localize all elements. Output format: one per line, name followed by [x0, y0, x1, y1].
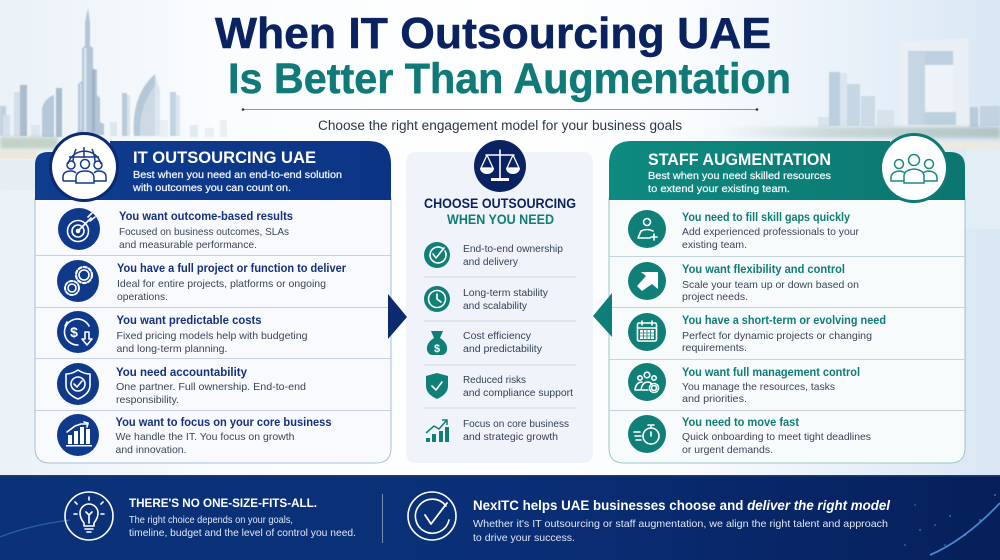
row: move fast: You need to move fast [682, 417, 799, 429]
row: outcome-based results: You want outcome-based results [119, 211, 293, 223]
header text [132, 148, 342, 194]
item: focus: Focus on core business [463, 419, 569, 430]
decoration: light swooshes and dots [0, 494, 1000, 555]
header text: Best when you need an end-to-end solution [133, 169, 342, 181]
icon: dollar with down arrow [57, 311, 99, 353]
row: outcome-based results: Focused on business outcomes, SLAs [119, 226, 289, 238]
icon: arrow up right [628, 262, 666, 300]
icon: shield check [57, 363, 99, 405]
item: cost [427, 331, 542, 355]
icon: target [58, 208, 100, 250]
item: focus [426, 419, 569, 443]
row: management control [628, 363, 860, 405]
title [215, 9, 791, 103]
row: accountability: One partner. Full ownership. End-to-end [116, 381, 306, 393]
icon: people with gear [628, 363, 666, 401]
header text: with outcomes you can count on. [132, 182, 291, 194]
panel: IT outsourcing UAE [35, 132, 391, 463]
row: accountability: You need accountability [116, 367, 248, 379]
header text: STAFF AUGMENTATION [648, 150, 831, 169]
panel header [35, 141, 391, 200]
callout: no one size fits all: The right choice depends on your goals, [129, 514, 293, 526]
footer band [0, 475, 1000, 560]
item: ownership [424, 242, 563, 268]
icon: stopwatch [628, 415, 666, 453]
row: management control: You manage the resources, tasks [682, 381, 835, 393]
row: accountability: responsibility. [116, 394, 179, 406]
icon: growth chart [57, 414, 99, 456]
icon: clock [424, 286, 450, 312]
panel header [609, 141, 965, 200]
icon: bars growth [426, 420, 449, 442]
icon: add person [628, 210, 666, 248]
icon: team [879, 133, 949, 203]
title: Is Better Than Augmentation [228, 55, 791, 103]
row: flexibility: You want flexibility and control [682, 264, 845, 276]
item: ownership: and delivery [463, 257, 518, 268]
item: ownership: End-to-end ownership [463, 244, 563, 255]
header text: Best when you need skilled resources [648, 170, 831, 182]
panel: choose outsourcing [406, 140, 593, 463]
row: move fast: Quick onboarding to meet tight deadlines [682, 431, 871, 443]
callout: no one size fits all: timeline, budget and the level of control you need. [129, 527, 356, 539]
row: short-term need: Perfect for dynamic projects or changing [682, 330, 872, 342]
callout: no one size fits all [65, 492, 356, 540]
icon: lightbulb [65, 492, 113, 540]
illustration: Dubai skyline left [0, 8, 227, 137]
item: stability: and scalability [463, 301, 527, 312]
row: full project: Ideal for entire projects, platforms or ongoing [117, 278, 326, 290]
row: accountability [57, 363, 306, 406]
title: When IT Outsourcing UAE [215, 9, 771, 58]
header text [648, 150, 831, 195]
header text: IT OUTSOURCING UAE [133, 148, 316, 167]
icon: check circle [424, 242, 450, 268]
row: skill gaps [628, 210, 859, 251]
illustration: shoreline and water [0, 127, 1000, 229]
item: focus: and strategic growth [463, 432, 558, 443]
row: full project [57, 260, 346, 303]
arrow: outsourcing pointer [388, 294, 407, 339]
row: move fast: or urgent demands. [682, 444, 773, 456]
callout: NexITC: Whether it's IT outsourcing or staff augmentation, we align the right talent and approach [473, 518, 888, 530]
row: predictable costs [57, 311, 308, 355]
icon: scales [474, 140, 526, 192]
heading: WHEN YOU NEED [447, 212, 554, 227]
callout: NexITC: NexITC helps UAE businesses choose and deliver the right model [473, 497, 891, 513]
row: flexibility: project needs. [682, 291, 748, 303]
item: risks: Reduced risks [463, 375, 526, 386]
row: short-term need: requirements. [682, 342, 747, 354]
heading: CHOOSE OUTSOURCING [424, 196, 576, 211]
item: risks [426, 373, 573, 399]
row: outcome-based results [58, 208, 293, 251]
row: move fast [628, 415, 871, 456]
subtitle with rule: Choose the right engagement model for your business goals [318, 118, 682, 133]
item: cost: and predictability [463, 344, 542, 355]
icon: dollar with down arrow: $ [70, 324, 78, 340]
icon: check badge [408, 492, 456, 540]
item: stability: Long-term stability [463, 288, 548, 299]
row: management control: and priorities. [682, 393, 747, 405]
illustration: Dubai Frame skyline right [818, 38, 1000, 128]
icon: money bag: $ [434, 343, 440, 355]
item: risks: and compliance support [463, 388, 573, 399]
row: full project: operations. [117, 291, 168, 303]
icon: shield [426, 373, 448, 399]
callout: NexITC [408, 492, 891, 544]
row: predictable costs: You want predictable costs [116, 315, 262, 327]
panel body [35, 198, 391, 463]
panel: staff augmentation [609, 133, 965, 463]
callout: no one size fits all: THERE'S NO ONE-SIZE-FITS-ALL. [129, 496, 317, 510]
row: focus on core business: We handle the IT. You focus on growth [116, 431, 295, 443]
row: predictable costs: Fixed pricing models help with budgeting [116, 330, 308, 342]
callout: NexITC: to drive your success. [473, 532, 575, 544]
row: flexibility [628, 262, 859, 303]
item: cost: Cost efficiency [463, 331, 531, 342]
icon: calendar [628, 313, 666, 351]
row: management control: You want full management control [682, 367, 860, 379]
icon: gears [57, 260, 99, 302]
row: predictable costs: and long-term planning. [116, 343, 228, 355]
arrow: augmentation pointer [593, 293, 612, 337]
row: focus on core business: You want to focus on your core business [116, 417, 332, 429]
row: flexibility: Scale your team up or down based on [682, 279, 859, 291]
row: short-term need: You have a short-term or evolving need [682, 315, 886, 327]
icon: global team [49, 132, 119, 202]
heading [424, 196, 576, 227]
row: skill gaps: existing team. [682, 239, 747, 251]
item: stability [424, 286, 548, 312]
row: skill gaps: Add experienced professionals to your [682, 226, 859, 238]
row: full project: You have a full project or function to deliver [117, 263, 346, 275]
row: skill gaps: You need to fill skill gaps quickly [682, 212, 851, 224]
row: focus on core business: and innovation. [116, 444, 186, 456]
header text: to extend your existing team. [648, 183, 790, 195]
row: focus on core business [57, 414, 332, 456]
panel body [609, 198, 965, 463]
row: short-term need [628, 313, 886, 354]
row: outcome-based results: and measurable performance. [119, 239, 257, 251]
